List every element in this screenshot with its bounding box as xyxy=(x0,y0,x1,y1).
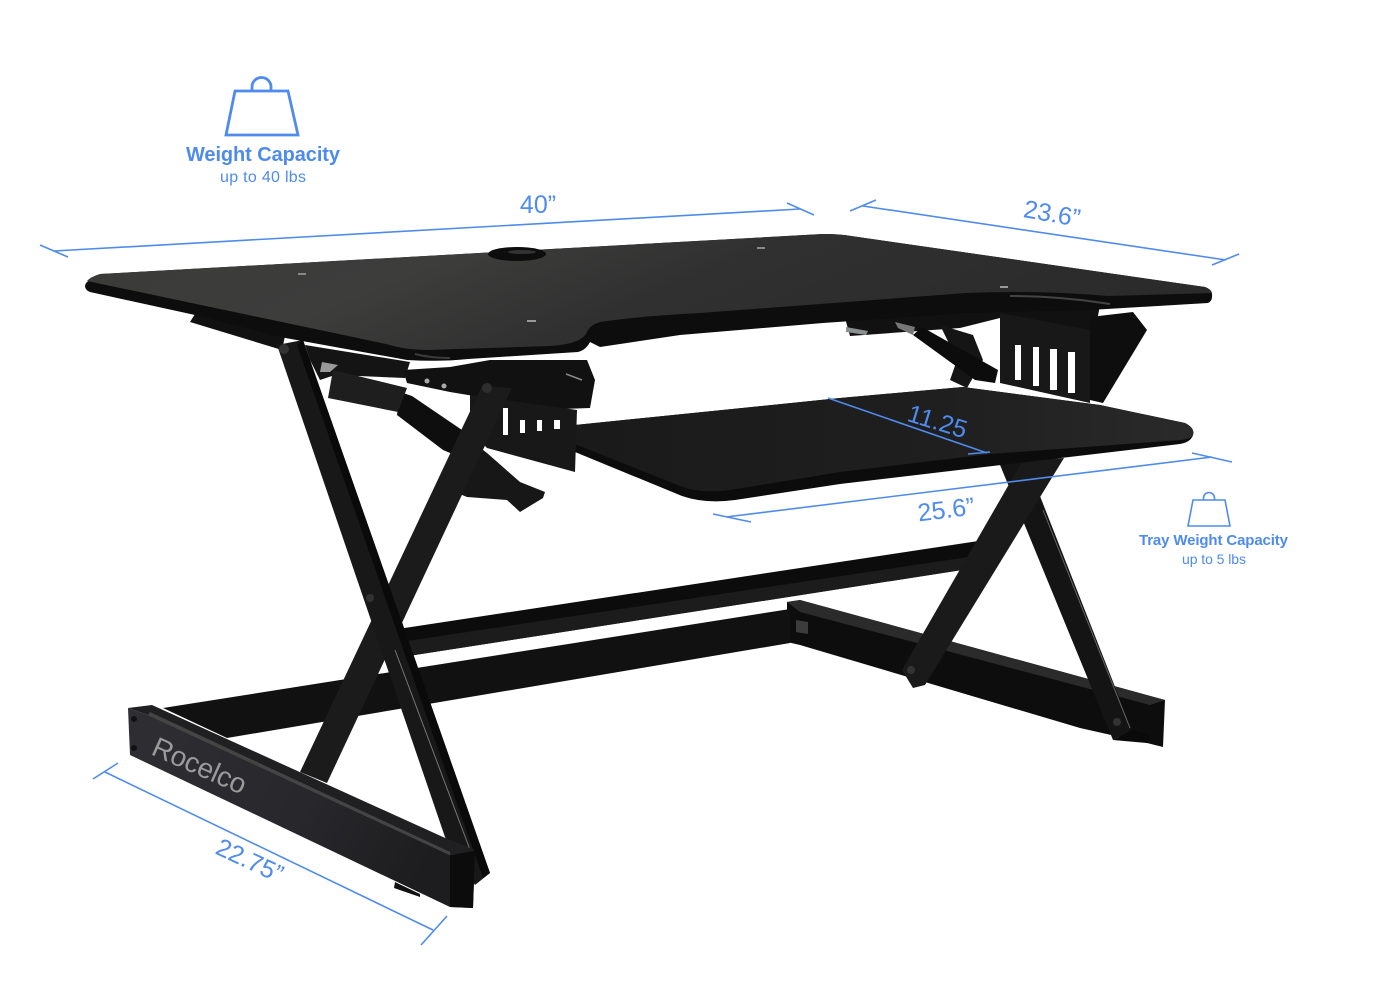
dimension: 11.25 tray depth: 11.25 xyxy=(904,400,971,444)
upper cross bar xyxy=(398,540,985,657)
dimension: 22.75 inch base depth: 22.75” xyxy=(212,833,288,889)
cable grommet xyxy=(488,247,546,261)
dimension: 25.6 inch tray width xyxy=(713,453,1232,527)
dimension: 23.6 inch depth xyxy=(850,195,1239,265)
heading: tray weight capacity: Tray Weight Capacity xyxy=(1139,532,1289,549)
dimension: 23.6 inch depth: 23.6” xyxy=(1022,195,1082,233)
brand text: Rocelco: Rocelco xyxy=(148,731,252,800)
dimension: 22.75 inch base depth xyxy=(93,763,447,945)
heading: weight capacity: Weight Capacity xyxy=(186,144,341,166)
desktop surface xyxy=(85,234,1212,361)
dimension: 40 inch width xyxy=(40,191,814,257)
desk photo illustration xyxy=(85,234,1212,908)
right base bar xyxy=(787,600,1165,747)
left base bar xyxy=(128,705,475,908)
dimension: 25.6 inch tray width: 25.6” xyxy=(916,493,976,527)
dimension: 40 inch width: 40” xyxy=(520,191,556,219)
icon: small weight xyxy=(1188,492,1230,526)
lower back rail xyxy=(163,609,790,738)
left mechanism xyxy=(190,314,595,512)
icon: weight xyxy=(226,78,298,135)
weight capacity callout xyxy=(186,78,341,186)
text: up to 5 lbs: up to 5 lbs xyxy=(1182,551,1246,567)
tray weight capacity callout xyxy=(1139,492,1289,567)
keyboard tray xyxy=(575,387,1193,501)
left X legs and left base xyxy=(128,340,512,908)
right mechanism xyxy=(845,305,1147,403)
text: up to 40 lbs: up to 40 lbs xyxy=(220,169,306,186)
right X legs xyxy=(902,458,1150,743)
dimension: 11.25 tray depth xyxy=(828,398,990,454)
